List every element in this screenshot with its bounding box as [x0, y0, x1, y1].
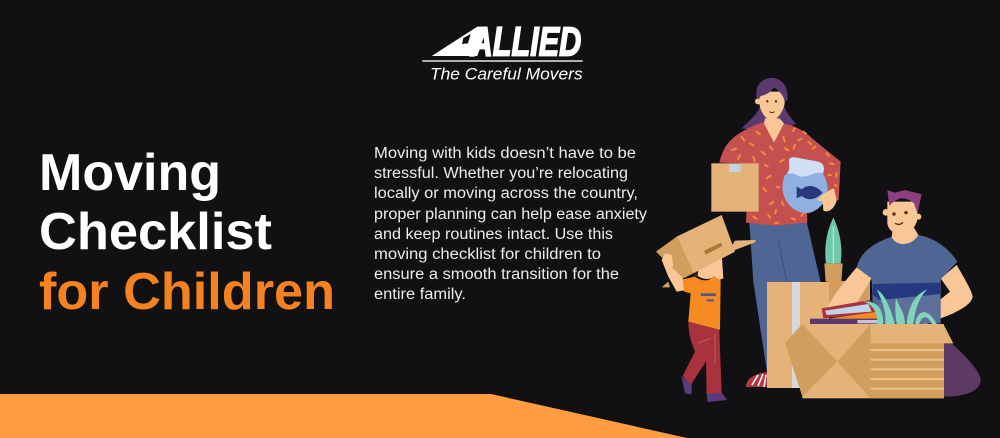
- intro paragraph: stressful. Whether you’re relocating: [374, 165, 628, 182]
- title: for Children: [39, 263, 335, 321]
- logo: Allied The Careful Movers: ALLIED: [470, 19, 581, 65]
- intro paragraph: proper planning can help ease anxiety: [374, 206, 647, 223]
- tall cardboard box: [746, 281, 870, 388]
- illustration: family moving: [656, 78, 981, 402]
- intro paragraph: locally or moving across the country,: [374, 185, 638, 202]
- title: [39, 144, 335, 321]
- logo: Allied The Careful Movers: The Careful Movers: [430, 64, 583, 83]
- plant in box: [863, 289, 937, 324]
- title: Checklist: [39, 203, 272, 261]
- child carrying box on head: [656, 215, 756, 402]
- bottom orange band: [0, 394, 687, 438]
- cardboard box held: [711, 163, 759, 212]
- intro paragraph: Moving with kids doesn’t have to be: [374, 145, 636, 162]
- front open cardboard box: [785, 324, 953, 398]
- fishbowl: [783, 157, 827, 213]
- box on child's head: [656, 215, 756, 287]
- books: [810, 300, 883, 324]
- intro paragraph: moving checklist for children to: [374, 246, 601, 263]
- intro paragraph: [374, 145, 647, 303]
- intro paragraph: and keep routines intact. Use this: [374, 226, 613, 243]
- potted plant on box: [824, 217, 843, 282]
- woman's head: [755, 78, 788, 120]
- woman with box and fishbowl: [711, 78, 841, 380]
- intro paragraph: ensure a smooth transition for the: [374, 266, 619, 283]
- intro paragraph: entire family.: [374, 286, 466, 303]
- title: Moving: [39, 144, 221, 202]
- logo: Allied The Careful Movers: [422, 19, 583, 83]
- man behind box: [810, 190, 981, 397]
- man's head: [883, 190, 922, 235]
